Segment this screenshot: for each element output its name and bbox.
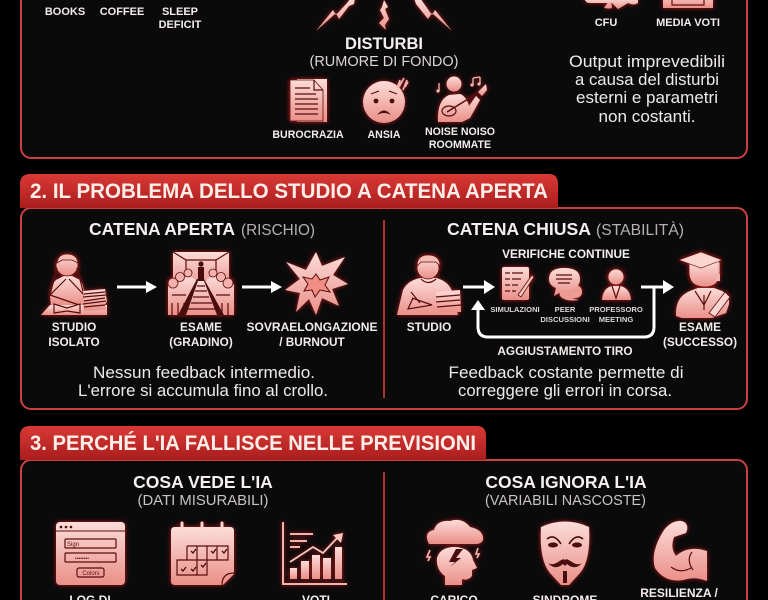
heading: catena chiusa: CATENA CHIUSA (447, 219, 591, 239)
heading tab 2: 2. IL PROBLEMA DELLO STUDIO A CATENA APERTA (30, 180, 548, 203)
text: output description (569, 53, 725, 126)
text: closed chain: Feedback costante permette di (448, 364, 684, 382)
icon: explosion (285, 252, 348, 315)
heading: verifiche continue: VERIFICHE CONTINUE (502, 247, 630, 261)
text: open chain (78, 364, 328, 400)
labels: checks: DISCUSSIONI (540, 315, 590, 324)
labels: checks: MEETING (599, 315, 633, 324)
outcome labels: MEDIA VOTI (656, 17, 720, 29)
heading tab 3 (20, 426, 486, 460)
outcome labels (595, 17, 720, 29)
divider (383, 472, 385, 600)
text: output description: esterni e parametri (576, 89, 718, 107)
icon: paperwork (290, 79, 327, 122)
labels: closed chain: ESAME (679, 320, 721, 334)
labels: closed chain: (SUCCESSO) (663, 335, 737, 349)
icon: isolated student (41, 254, 107, 315)
labels: closed chain (407, 320, 737, 358)
icon: cognitive load (427, 520, 483, 585)
inputs labels (45, 6, 202, 31)
labels: open chain: ESAME (180, 320, 222, 334)
labels: measurable (69, 593, 330, 600)
inputs labels: BOOKS (45, 6, 85, 18)
panel 2: open chain vs closed chain (20, 174, 747, 409)
heading: what AI ignores: (VARIABILI NASCOSTE) (485, 493, 646, 509)
heading: what AI ignores: COSA IGNORA L'IA (485, 472, 647, 492)
heading: catena aperta (89, 219, 315, 239)
icon: grade chart (283, 522, 347, 584)
labels: open chain: ISOLATO (48, 335, 100, 349)
icon: media voti (663, 0, 713, 8)
inputs labels: COFFEE (100, 6, 144, 18)
heading: what AI ignores (485, 472, 647, 509)
text: open chain: L'errore si accumula fino al crollo. (78, 382, 328, 400)
disturbance labels: ROOMMATE (429, 139, 491, 151)
labels: hidden: RESILIENZA / (640, 586, 718, 600)
heading: catena aperta: CATENA APERTA (89, 219, 235, 239)
heading tab 3: 3. PERCHÉ L'IA FALLISCE NELLE PREVISIONI (30, 432, 476, 455)
arrow (117, 281, 157, 293)
outcome labels: CFU (595, 17, 617, 29)
labels: open chain (48, 320, 378, 349)
heading: disturbi (309, 35, 459, 70)
labels: closed chain: AGGIUSTAMENTO TIRO (497, 344, 633, 358)
text: closed chain (448, 364, 684, 400)
heading tab 2 (20, 174, 558, 208)
inputs labels: SLEEP (162, 6, 198, 18)
labels: checks: PROFESSORO (589, 305, 643, 314)
heading: catena chiusa (447, 219, 684, 239)
icon: login window: Sign (67, 542, 79, 548)
disturbance labels: NOISE NOISO (425, 126, 495, 138)
labels: checks: SIMULAZIONI (490, 305, 540, 314)
heading: catena aperta: (RISCHIO) (241, 222, 315, 239)
labels: open chain: STUDIO (52, 320, 96, 334)
divider (383, 220, 385, 398)
disturbance labels: ANSIA (368, 129, 401, 141)
icon: impostor mask (541, 522, 589, 585)
icon: exam steps (168, 252, 234, 315)
labels: open chain: (GRADINO) (169, 335, 233, 349)
arrow: forward (641, 280, 674, 294)
labels: checks (490, 305, 643, 324)
inputs labels: DEFICIT (159, 19, 202, 31)
icon: login window: •••••••• (75, 556, 89, 562)
heading: disturbi: (RUMORE DI FONDO) (309, 54, 459, 70)
labels: closed chain: STUDIO (407, 320, 451, 334)
labels: open chain: / BURNOUT (279, 335, 346, 349)
icon: simulation document (502, 267, 534, 300)
arrow (463, 280, 495, 294)
labels: open chain: SOVRAELONGAZIONE (246, 320, 378, 334)
text: output description: non costanti. (598, 108, 696, 126)
arrow (242, 281, 282, 293)
text: output description: a causa del disturbi (575, 71, 719, 89)
icon: login window: Colors (82, 571, 100, 577)
icon: anxious face (363, 78, 408, 123)
text: output description: Output imprevedibili (569, 53, 725, 71)
icon: cfu (585, 0, 638, 9)
heading: what AI sees: (DATI MISURABILI) (138, 493, 268, 509)
disturbance labels (272, 126, 495, 151)
icon: flexed arm (654, 521, 707, 581)
icon: lightning bolts (316, 0, 452, 31)
disturbance labels: BUROCRAZIA (272, 129, 344, 141)
labels: hidden (430, 586, 718, 600)
icon: graduate (676, 252, 730, 318)
panel 3: why AI fails (20, 426, 747, 600)
icon: professor (602, 269, 631, 300)
heading: what AI sees (133, 472, 273, 509)
icon: peer chat (549, 268, 582, 300)
arrow: feedback loop (471, 287, 654, 337)
icon: student (397, 255, 461, 315)
text: open chain: Nessun feedback intermedio. (93, 364, 315, 382)
heading: what AI sees: COSA VEDE L'IA (133, 472, 273, 492)
icon: login window (56, 522, 125, 585)
heading: disturbi: DISTURBI (345, 35, 423, 53)
heading: catena chiusa: (STABILITÀ) (596, 220, 684, 239)
panel 1: open system (21, 0, 747, 158)
icon: calendar (171, 523, 234, 585)
icon: roommate with guitar (436, 76, 487, 122)
text: closed chain: correggere gli errori in corsa. (458, 382, 672, 400)
labels: checks: PEER (555, 305, 576, 314)
